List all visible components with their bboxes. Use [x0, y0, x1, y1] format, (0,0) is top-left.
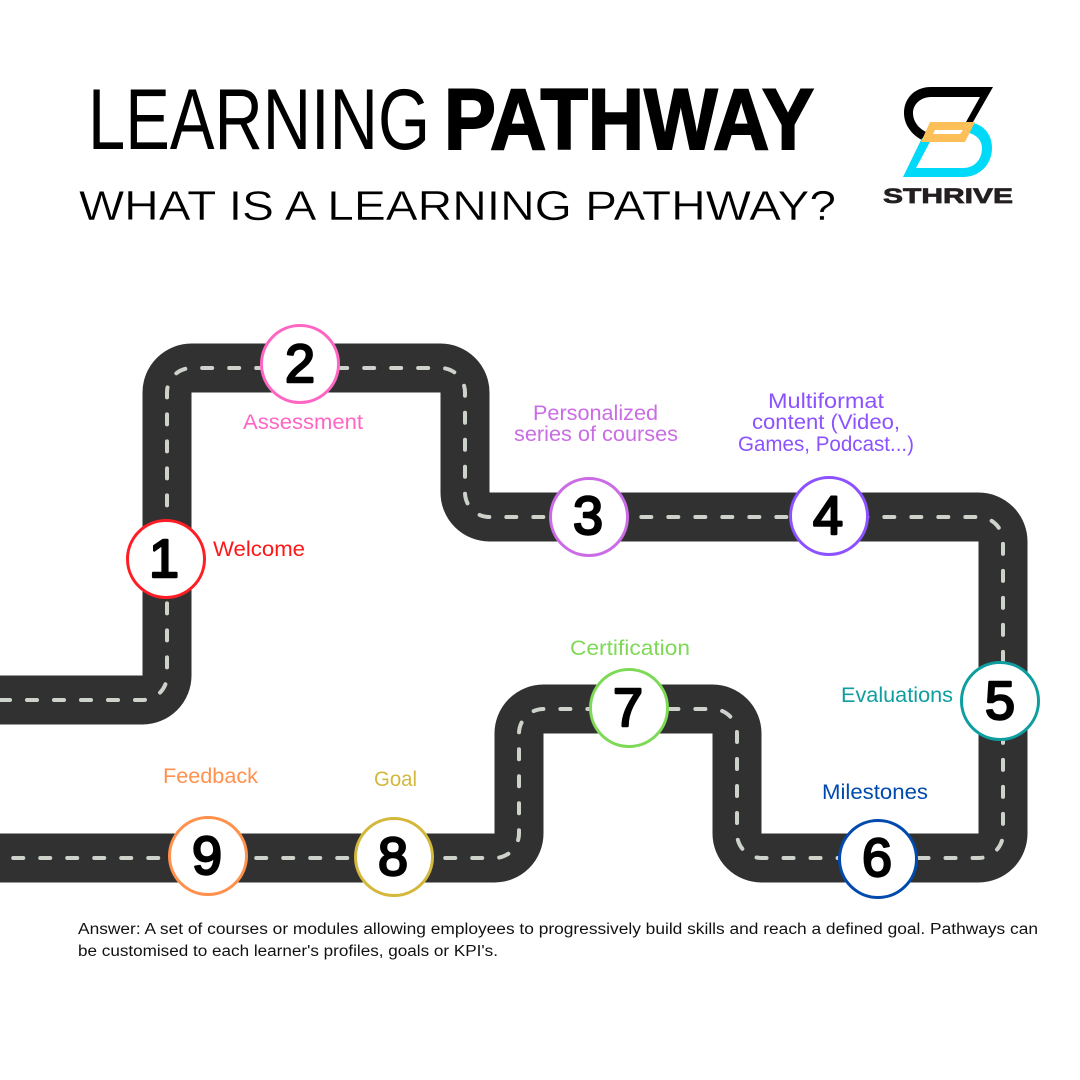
road	[0, 368, 1003, 858]
step 5: Evaluations: 5	[985, 671, 1015, 731]
answer text: be customised to each learner's profiles, goals or KPI's.	[78, 943, 498, 960]
title	[88, 72, 814, 168]
step 1: Welcome	[128, 520, 305, 598]
step 5: Evaluations	[841, 662, 1038, 740]
step 6: Milestones	[822, 781, 928, 898]
step 3: Personalized series of courses: Personalized	[533, 402, 658, 425]
step 1: Welcome: Welcome	[213, 538, 305, 561]
step 3: Personalized series of courses: series of courses	[514, 423, 678, 446]
step 2: Assessment: 2	[285, 334, 315, 394]
step 3: Personalized series of courses	[514, 402, 678, 556]
step 5: Evaluations: Evaluations	[841, 684, 953, 707]
answer text	[78, 921, 1038, 960]
step 4: Multiformat content: content (Video,	[752, 411, 900, 434]
step 1: Welcome: 1	[149, 529, 179, 589]
step 7: Certification: 7	[613, 678, 643, 738]
step 9: Feedback: 9	[192, 826, 222, 886]
step 4: Multiformat content: Multiformat	[768, 390, 884, 413]
step 8: Goal: Goal	[374, 768, 417, 791]
step 2: Assessment	[243, 326, 363, 434]
step 6: Milestones: Milestones	[822, 781, 928, 804]
step 4: Multiformat content: Games, Podcast...)	[738, 433, 914, 456]
step 9: Feedback: Feedback	[163, 765, 259, 788]
step 3: Personalized series of courses: 3	[573, 486, 603, 546]
step 8: Goal	[356, 768, 432, 896]
logo: Sthrive	[883, 87, 1013, 208]
title: PATHWAY	[444, 72, 814, 168]
step 9: Feedback	[163, 765, 259, 894]
step 4: Multiformat content: 4	[813, 486, 843, 546]
title: LEARNING	[88, 72, 430, 168]
subtitle: WHAT IS A LEARNING PATHWAY?	[79, 182, 836, 229]
answer text: Answer: A set of courses or modules allowing employees to progressively build skills and reach a defined goal. Pathways can	[78, 921, 1038, 938]
step 7: Certification	[570, 637, 690, 746]
step 8: Goal: 8	[378, 827, 408, 887]
step 6: Milestones: 6	[862, 828, 892, 888]
step 4: Multiformat content	[738, 390, 914, 554]
logo: Sthrive: STHRIVE	[883, 185, 1013, 208]
step 7: Certification: Certification	[570, 637, 690, 660]
step 2: Assessment: Assessment	[243, 411, 363, 434]
